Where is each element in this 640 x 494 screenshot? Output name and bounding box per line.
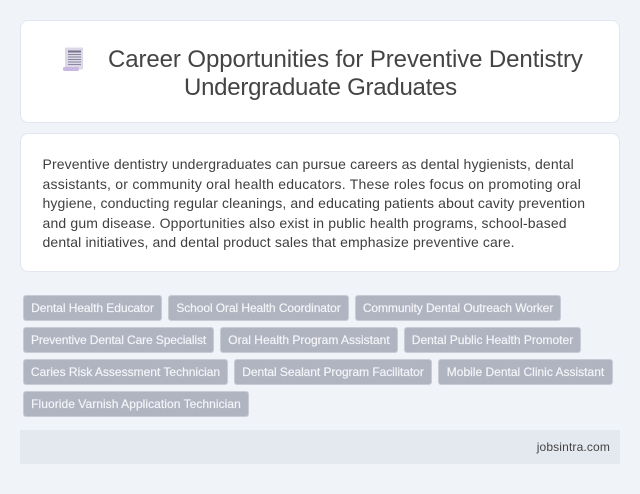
panel: description (20, 133, 620, 272)
tag (355, 295, 561, 321)
tag (404, 327, 581, 353)
description text (42, 156, 585, 250)
tag (168, 295, 349, 321)
tag (438, 359, 613, 385)
tag: Oral Health Program Assistant (228, 333, 390, 347)
tag: Dental Health Educator (31, 301, 154, 315)
tag (23, 391, 249, 417)
panel: description: hygiene, conducting regular cleanings, and educating patients about cavity prevention (42, 195, 585, 211)
footer text: jobsintra.com: jobsintra.com (537, 440, 610, 454)
tag (234, 359, 432, 385)
panel: description: Preventive dentistry undergraduates can pursue careers as dental hygienists, dental (42, 156, 574, 172)
title: Undergraduate Graduates (184, 74, 457, 101)
title (108, 46, 583, 101)
tag: Caries Risk Assessment Technician (31, 365, 220, 379)
tag: Preventive Dental Care Specialist (31, 333, 206, 347)
tag (220, 327, 398, 353)
panel: description: dental initiatives, and dental product sales that emphasize preventive care. (42, 234, 515, 250)
panel: description: and gum disease. Opportunities also exist in public health programs, school-based (42, 215, 567, 231)
tag (23, 295, 162, 321)
tag: Dental Public Health Promoter (412, 333, 573, 347)
title: Career Opportunities for Preventive Dentistry (108, 46, 583, 73)
tag (23, 327, 214, 353)
tag: School Oral Health Coordinator (176, 301, 341, 315)
panel: description: assistants, or community oral health educators. These roles focus on promoting oral (42, 176, 581, 192)
footer bar (20, 430, 620, 464)
tag: Community Dental Outreach Worker (363, 301, 553, 315)
tag: Mobile Dental Clinic Assistant (447, 365, 604, 379)
icon: document scroll (63, 48, 83, 71)
tag: Dental Sealant Program Facilitator (242, 365, 424, 379)
tag: Fluoride Varnish Application Technician (31, 397, 241, 411)
tag (23, 359, 228, 385)
panel: header (20, 20, 620, 123)
tag list (23, 295, 613, 417)
